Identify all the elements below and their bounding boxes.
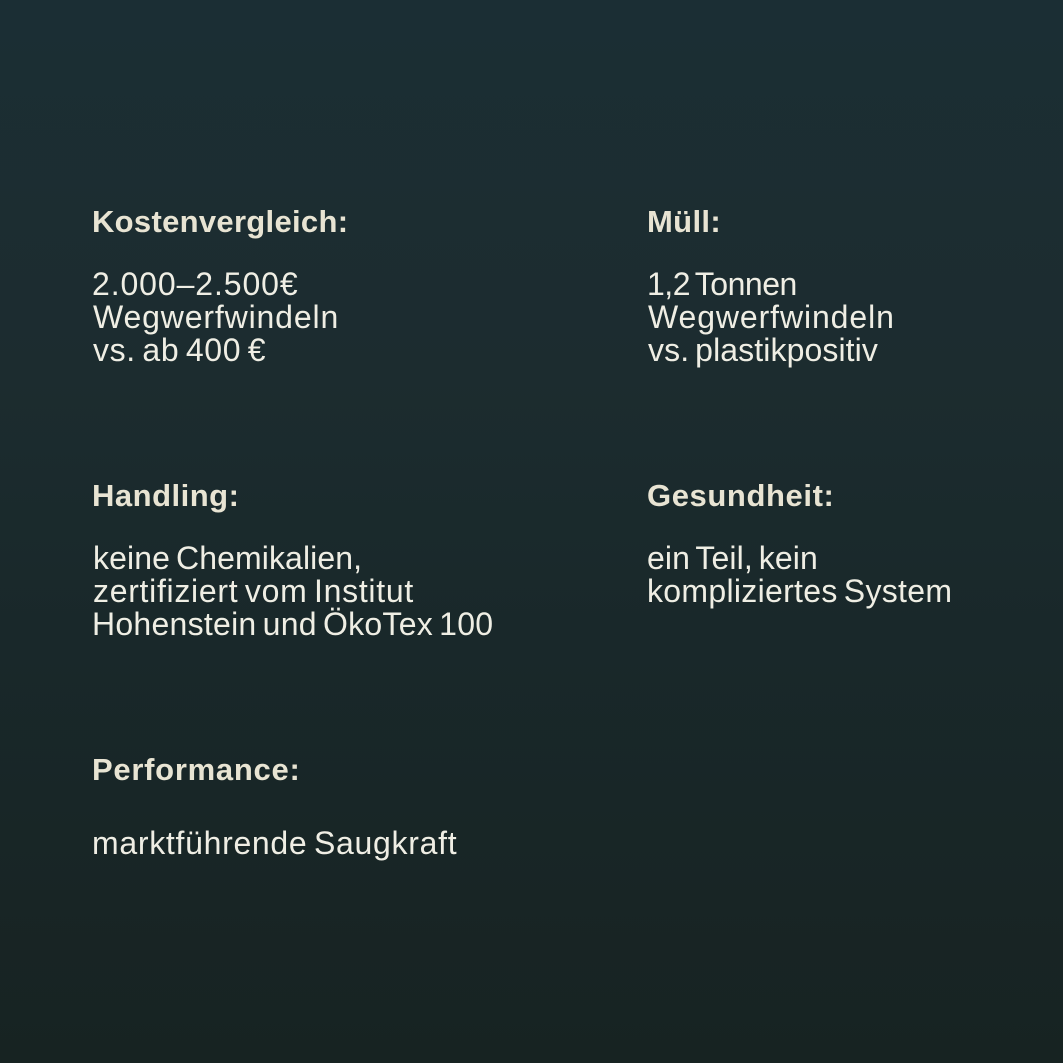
text: Kostenvergleich details: [92, 266, 339, 368]
text: Gesundheit details: [647, 540, 952, 609]
text: Gesundheit details: ein Teil, kein: [647, 540, 818, 576]
text: Handling details: zertifiziert vom Institut: [93, 573, 414, 609]
text: Kostenvergleich details: vs. ab 400 €: [93, 332, 266, 368]
text: Müll details: Wegwerfwindeln: [648, 299, 895, 335]
text: Müll details: 1,2 Tonnen: [647, 266, 797, 302]
heading: Müll: Müll:: [647, 204, 721, 239]
heading: Handling: Handling:: [92, 478, 239, 513]
text: Kostenvergleich details: 2.000–2.500€: [92, 266, 299, 302]
text: Müll details: vs. plastikpositiv: [648, 332, 878, 368]
heading: Kostenvergleich: Kostenvergleich:: [92, 204, 348, 239]
text: Performance details: marktführende Saugkraft: [92, 825, 457, 861]
text: Gesundheit details: kompliziertes System: [647, 573, 952, 609]
text: Handling details: [92, 540, 493, 642]
text: Müll details: [647, 266, 895, 368]
text: Handling details: keine Chemikalien,: [93, 540, 362, 576]
text: Kostenvergleich details: Wegwerfwindeln: [93, 299, 339, 335]
text: Handling details: Hohenstein und ÖkoTex 100: [92, 606, 493, 642]
heading: Performance: Performance:: [92, 752, 300, 787]
heading: Gesundheit: Gesundheit:: [647, 478, 834, 513]
